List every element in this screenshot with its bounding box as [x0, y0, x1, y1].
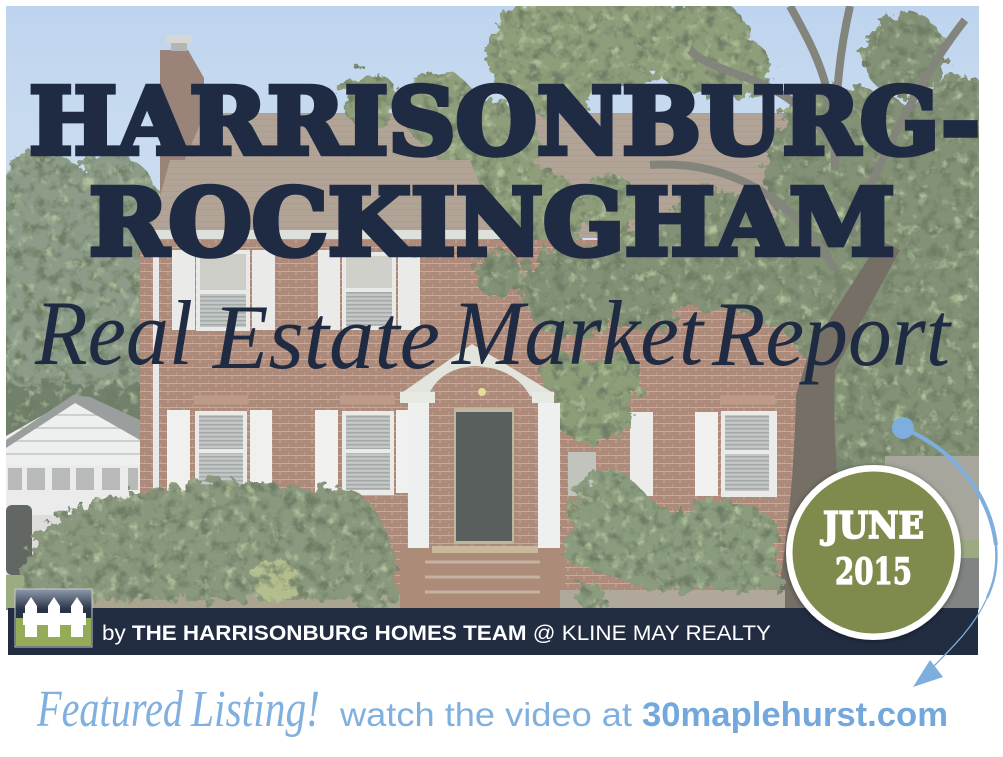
upper roof	[160, 113, 494, 240]
heading: Harrisonburg: HARRISONBURG-	[29, 68, 980, 176]
gutter	[148, 230, 520, 239]
chimney	[160, 35, 204, 196]
lower window 4	[695, 411, 777, 497]
heading: Rockingham: ROCKINGHAM	[89, 168, 895, 276]
badge: June 2015	[786, 465, 961, 640]
main roof	[150, 160, 498, 232]
tree trunk	[775, 240, 900, 610]
shrub low centre	[356, 594, 390, 608]
brick wall	[140, 240, 810, 610]
badge month: JUNE	[820, 505, 924, 547]
subheading: report title	[34, 282, 952, 388]
dark foliage behind garage	[6, 378, 140, 426]
foreground tree over right wing	[540, 350, 642, 442]
upper left window	[172, 250, 275, 331]
badge year: 2015	[835, 551, 912, 593]
brick lintels	[194, 396, 775, 404]
upper centre window	[318, 250, 420, 330]
upper right tree canopy	[342, 0, 773, 263]
lower window 2	[315, 410, 408, 495]
arrow: curved pointer to website	[892, 417, 996, 687]
lower window 3	[568, 412, 653, 496]
lower window 1	[167, 410, 272, 495]
subheading: report title: Real	[34, 282, 193, 384]
roof right extension	[530, 113, 789, 238]
garage	[6, 395, 140, 525]
featured listing label: Listing!	[190, 681, 320, 738]
featured listing label: Featured	[36, 681, 184, 738]
subheading: report title: Market	[450, 282, 705, 384]
shrubs left	[23, 480, 398, 600]
driveway	[942, 558, 979, 610]
right tree canopy	[476, 13, 1003, 475]
logo: picket fence	[15, 589, 92, 647]
front steps	[400, 546, 565, 608]
footer bar	[8, 608, 978, 655]
portico	[400, 344, 560, 551]
video call to action: watch the video at	[339, 696, 632, 733]
photo wash	[6, 6, 979, 610]
subheading: report title: Report	[711, 283, 952, 385]
subheading: report title: Estate	[211, 286, 440, 388]
fence	[885, 456, 979, 540]
light shrub	[254, 558, 298, 602]
sky	[6, 6, 979, 240]
tree branches	[650, 6, 965, 270]
shrubs right	[565, 470, 778, 611]
left tree	[0, 152, 160, 400]
garage lower wall	[6, 515, 62, 575]
lawn corner	[6, 575, 25, 608]
byline: by THE HARRISONBURG HOMES TEAM @ KLINE MAY REALTY	[102, 622, 771, 645]
right hedge by fence	[960, 540, 979, 558]
car hint	[6, 505, 32, 575]
lower backdrop	[6, 332, 854, 610]
ground strip	[92, 590, 400, 608]
website url: 30maplehurst.com	[642, 696, 948, 734]
front door	[454, 408, 514, 544]
featured listing label	[36, 681, 320, 738]
